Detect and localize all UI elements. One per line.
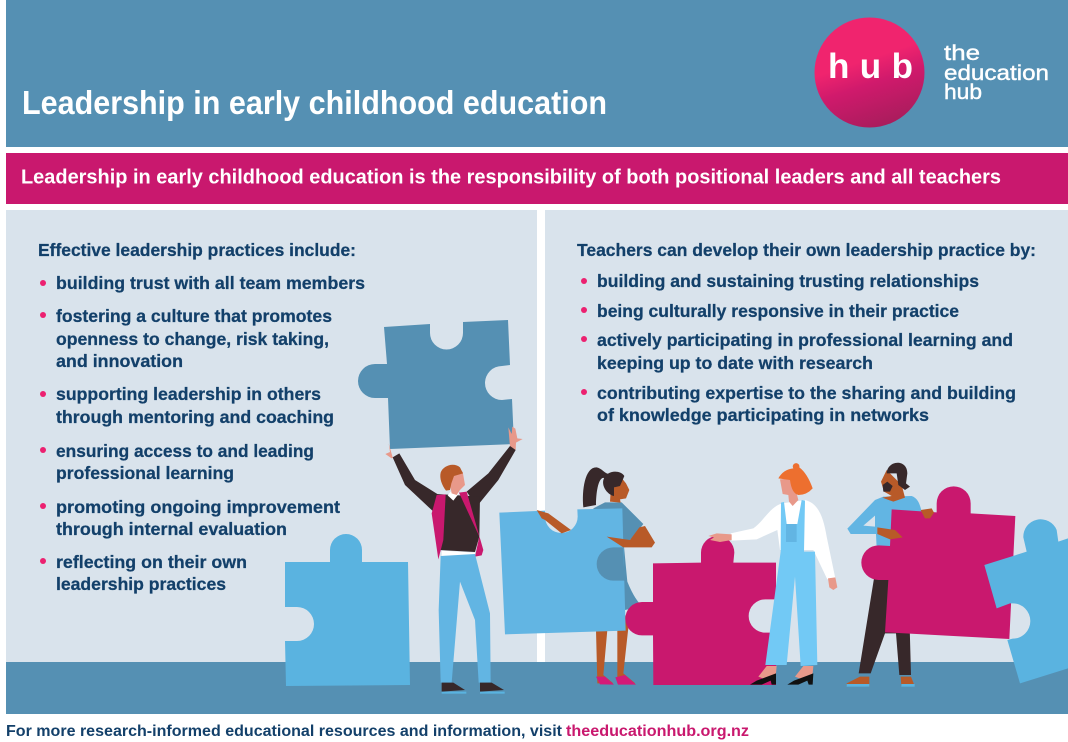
right bullet list [581, 271, 1016, 425]
right bullet list: keeping up to date with research [597, 353, 873, 373]
right heading: Teachers can develop their own leadership practice by: [577, 240, 1036, 260]
left bullet list: openness to change, risk taking, [56, 329, 329, 349]
woman arms [537, 510, 571, 533]
left bullet list: supporting leadership in others [56, 384, 321, 404]
header banner [6, 0, 1068, 147]
right bullet list: actively participating in professional learning and [597, 330, 1013, 350]
left bullet list: ensuring access to and leading [56, 441, 314, 461]
woman hair and head [583, 467, 609, 507]
woman legs [596, 607, 635, 683]
man head [881, 470, 905, 502]
icon: magenta puzzle piece [625, 536, 776, 685]
left bullet list: professional learning [56, 463, 234, 483]
figure: woman in overalls [708, 463, 837, 685]
icon: dark blue puzzle piece [358, 320, 514, 449]
right bullet list: contributing expertise to the sharing and building [597, 383, 1016, 403]
woman dress [593, 502, 643, 610]
panel: effective leadership practices background [6, 210, 537, 662]
right bullet list: building and sustaining trusting relationships [597, 271, 979, 291]
logo: the education hub: education [944, 62, 1049, 85]
panel: teachers leadership practice background [545, 210, 1068, 662]
magenta puzzle piece held by man [861, 486, 1015, 639]
left bullet list: leadership practices [56, 574, 226, 594]
figure: woman with ponytail holding puzzle piece [499, 467, 655, 685]
logo: the education hub: the [944, 42, 980, 65]
right bullet list: being culturally responsive in their practice [597, 301, 959, 321]
left heading: Effective leadership practices include: [38, 240, 356, 260]
left bullet list: building trust with all team members [56, 273, 365, 293]
man hands [877, 527, 903, 539]
subtitle band [6, 153, 1068, 204]
left bullet list: and innovation [56, 351, 183, 371]
right bullet list: of knowledge participating in networks [597, 405, 929, 425]
footer: theeducationhub.org.nz [566, 723, 749, 740]
logo: the education hub [814, 18, 1049, 128]
icon: light blue puzzle piece at right edge [984, 519, 1068, 683]
right text block [577, 240, 1036, 425]
overalls woman arms and shirt [731, 500, 835, 579]
title: Leadership in early childhood education [22, 84, 607, 121]
left bullet list: fostering a culture that promotes [56, 306, 332, 326]
left bullet list: through internal evaluation [56, 519, 287, 539]
left bullet list: reflecting on their own [56, 552, 247, 572]
overalls [765, 500, 817, 666]
left bullet list: through mentoring and coaching [56, 407, 334, 427]
left bullet list: promoting ongoing improvement [56, 497, 340, 517]
subtitle band: Leadership in early childhood education is the responsibility of both positional leaders and all teachers [21, 166, 1001, 188]
head [780, 478, 798, 506]
man legs [859, 578, 911, 675]
left bullet list [40, 273, 365, 594]
footer: For more research-informed educational resources and information, visit [6, 723, 563, 740]
floor band [6, 662, 1068, 714]
puzzle piece held by woman [499, 508, 626, 634]
logo: the education hub: hub [944, 81, 982, 104]
figure: man with beard holding puzzle piece [847, 463, 1068, 687]
figure: man lifting puzzle piece [385, 427, 523, 694]
logo: the education hub: hub [828, 47, 913, 86]
left text block [38, 240, 365, 594]
icon: light blue puzzle piece on floor [285, 534, 410, 686]
shoes [758, 666, 813, 680]
man torso and arm [847, 496, 922, 548]
